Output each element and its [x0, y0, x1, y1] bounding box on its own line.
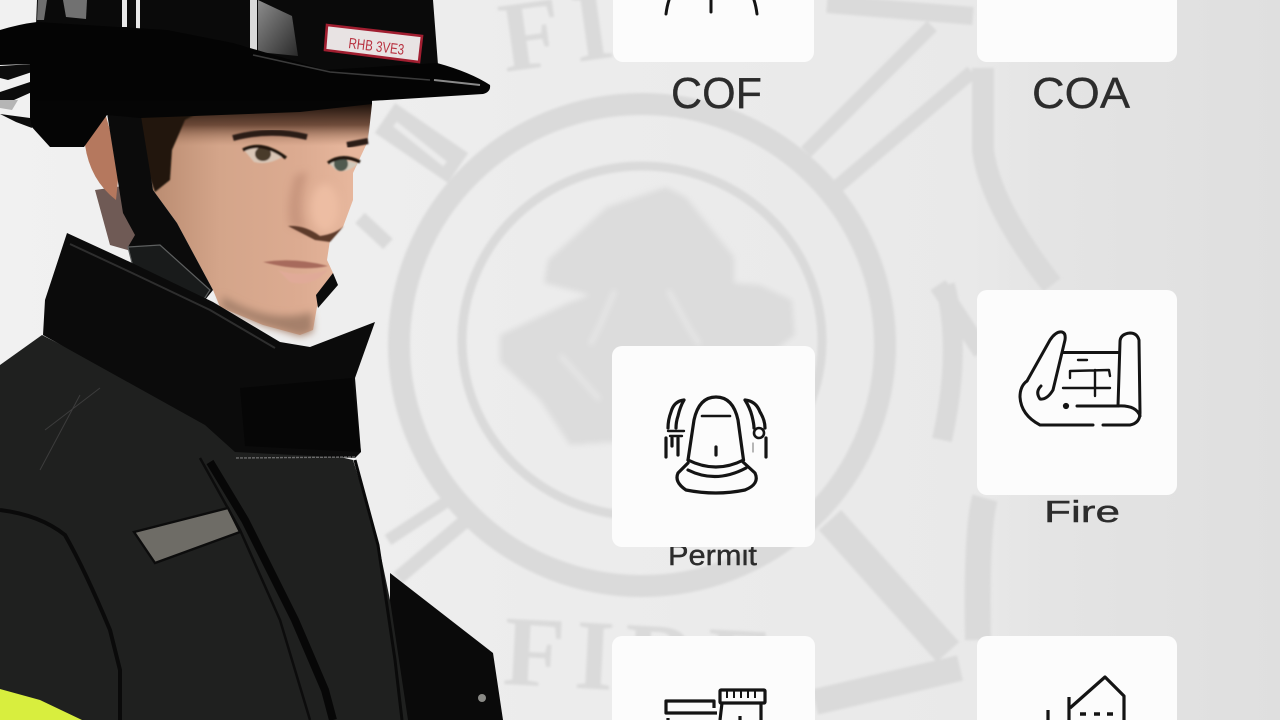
chin tab: [316, 273, 338, 308]
watermark: fire department emblem: [360, 0, 1052, 720]
coat sleeve back: [390, 573, 503, 720]
face shading: [138, 104, 372, 336]
right eye: [328, 157, 360, 171]
coat snap: [478, 694, 486, 702]
watermark text: FIRE: [501, 595, 776, 720]
neck behind ear: [95, 185, 145, 255]
helmet name badge: [325, 25, 422, 62]
icon card: Permit alarm beacon: [612, 346, 815, 547]
forehead shadow: [140, 104, 372, 150]
brim highlights: [253, 55, 430, 80]
label: Fire: Fire: [1044, 494, 1120, 529]
icon: alarm beacon: [666, 397, 766, 493]
icon: blueprint scroll: [1020, 332, 1140, 425]
eyebrows: [233, 133, 368, 145]
icon card: house: [977, 636, 1177, 720]
face: [140, 100, 372, 335]
ear: [85, 113, 118, 200]
sleeve seam: [0, 510, 120, 720]
label: COF: COF: [671, 69, 762, 118]
icon: COF partial outline: [666, 0, 757, 14]
label: COA: COA: [1032, 69, 1131, 118]
photo: firefighter: [0, 0, 503, 720]
watermark text: [493, 0, 776, 720]
helmet brim: [0, 22, 490, 101]
reflective chest patch: [134, 508, 240, 563]
nose side shading: [288, 172, 308, 232]
crown highlights: [37, 0, 298, 56]
icon: house outline: [1048, 677, 1124, 720]
chin strap: [107, 110, 213, 310]
shoulder stitching: [40, 388, 100, 470]
icon card: Fire blueprint: [977, 290, 1177, 495]
icon card: building with ruler: [612, 636, 815, 720]
icon card: COF: [613, 0, 814, 62]
collar flap: [240, 378, 361, 452]
chin strap buckle: [128, 245, 210, 310]
mouth: [263, 260, 328, 268]
helmet gear left: [0, 64, 32, 128]
coat body: [0, 335, 408, 720]
watermark: horse emblem: [500, 187, 795, 445]
left eye: [243, 146, 286, 163]
hair: [138, 104, 215, 192]
stubble jaw shading: [222, 296, 313, 336]
yellow reflective trim: [0, 689, 82, 720]
nose highlight: [311, 184, 339, 232]
front edge seam: [355, 460, 402, 720]
icon: building and ruler: [666, 690, 765, 720]
helmet name badge: RHB 3VE3: [348, 35, 405, 59]
zipper placket: [210, 462, 333, 720]
icon card: COA: [977, 0, 1177, 62]
under-helmet black mass: [30, 62, 372, 147]
helmet crown: [36, 0, 438, 78]
label: Permit: Permit: [668, 540, 757, 572]
nose underside: [288, 226, 344, 242]
collar: [43, 233, 375, 458]
